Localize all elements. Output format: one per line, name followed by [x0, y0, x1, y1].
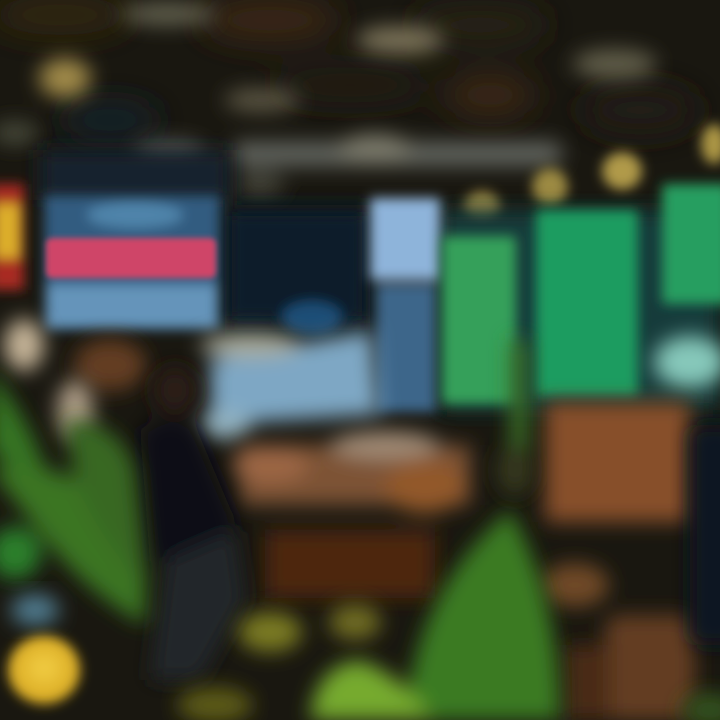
panel: centre dark screen [232, 216, 362, 334]
panel: red and yellow sign at left edge [0, 184, 24, 290]
panel: pale blue lower wall [199, 330, 380, 439]
white blurred lights at left [4, 319, 93, 440]
blurred yellow foliage bottom [177, 604, 720, 720]
plant leaves lower left [0, 370, 148, 625]
panel: dark wall behind screens [40, 150, 720, 410]
panel: green screens [442, 184, 720, 404]
panel: stacked boxes lower right [541, 563, 695, 720]
seated person silhouette [140, 366, 245, 680]
plant stem centre [497, 340, 533, 496]
yellow pendant lamps [464, 124, 720, 223]
ceiling lights [0, 3, 657, 199]
ceiling background [0, 0, 700, 138]
large plant leaf bottom centre [310, 510, 560, 720]
dark figure at right edge [690, 425, 720, 645]
blue glow and yellow lamp bottom left [8, 594, 80, 704]
panel: blue screen with red banner [44, 195, 220, 330]
panel: wooden tables and counters [74, 339, 690, 598]
panel: light blue tall screen [370, 198, 440, 412]
red banner [46, 238, 216, 278]
